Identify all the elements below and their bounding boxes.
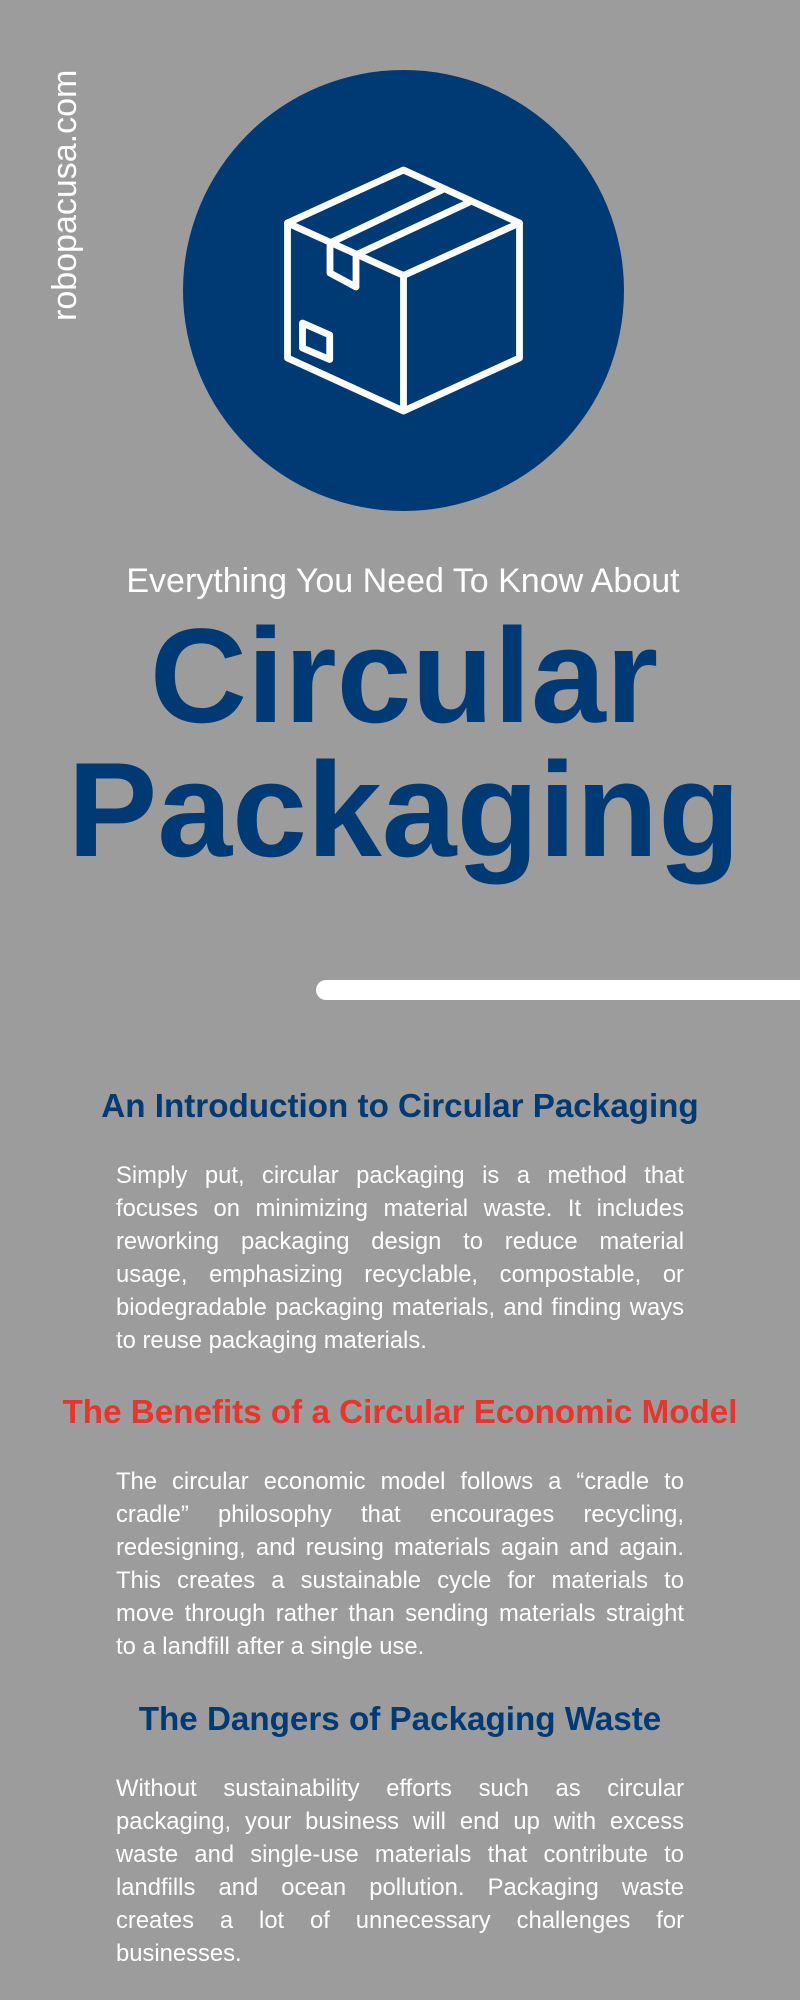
text block: dangers [116, 1775, 684, 1967]
text block: dangers: landfills and ocean pollution. Packaging waste [116, 1874, 684, 1901]
text block: benefits: This creates a sustainable cycle for materials to [116, 1567, 684, 1594]
text block: dangers: businesses. [116, 1940, 242, 1967]
heading: benefits: The Benefits of a Circular Economic Model [63, 1394, 737, 1431]
text block: benefits: cradle” philosophy that encourages recycling, [116, 1501, 684, 1528]
icon: package box in navy circle [183, 70, 624, 511]
text block: introduction: biodegradable packaging materials, and finding ways [116, 1294, 684, 1321]
text block: benefits: The circular economic model follows a “cradle to [116, 1468, 684, 1495]
divider bar [316, 980, 800, 1000]
text block: introduction: usage, emphasizing recyclable, compostable, or [116, 1261, 684, 1288]
heading: dangers: The Dangers of Packaging Waste [139, 1701, 661, 1738]
text block: dangers: Without sustainability efforts such as circular [116, 1775, 684, 1802]
text block: introduction: focuses on minimizing material waste. It includes [116, 1195, 684, 1222]
text block: benefits: to a landfill after a single use. [116, 1633, 424, 1660]
text block: introduction: reworking packaging design to reduce material [116, 1228, 684, 1255]
text block: dangers: creates a lot of unnecessary challenges for [116, 1907, 684, 1934]
main title [68, 600, 740, 885]
vertical website label: robopacusa.com [46, 70, 84, 321]
text block: introduction: Simply put, circular packaging is a method that [116, 1162, 684, 1189]
main title: Packaging [68, 734, 740, 885]
heading: introduction: An Introduction to Circular Packaging [101, 1088, 699, 1125]
main title: Circular [150, 600, 658, 751]
text block: benefits [116, 1468, 684, 1660]
text block: dangers: packaging, your business will end up with excess [116, 1808, 684, 1835]
text block: benefits: redesigning, and reusing materials again and again. [116, 1534, 684, 1561]
text block: benefits: move through rather than sending materials straight [116, 1600, 684, 1627]
text block: introduction: to reuse packaging materials. [116, 1327, 427, 1354]
subtitle: Everything You Need To Know About [126, 562, 680, 600]
text block: introduction [116, 1162, 684, 1354]
text block: dangers: waste and single-use materials that contribute to [116, 1841, 684, 1868]
